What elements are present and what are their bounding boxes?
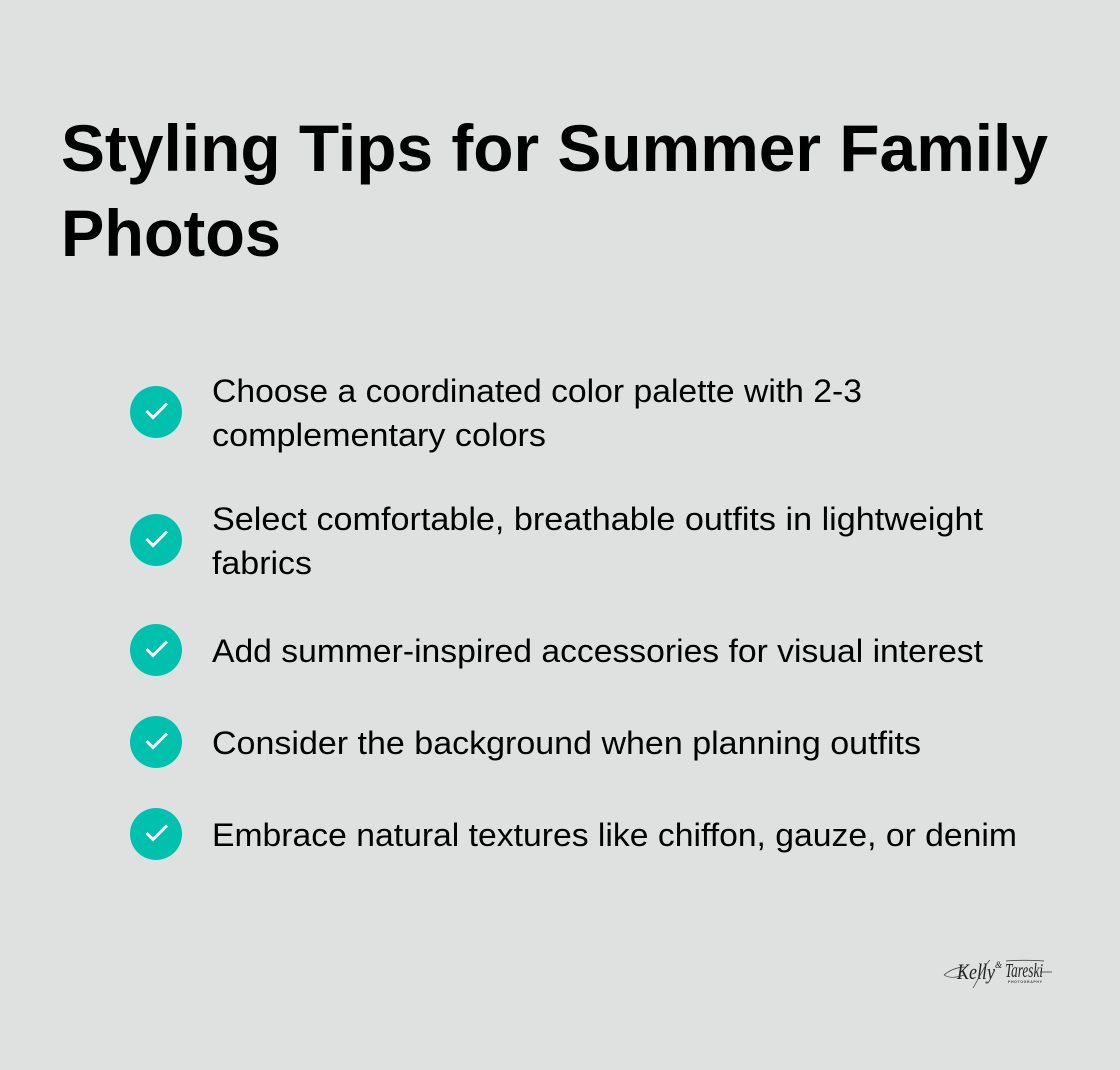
text: color palette: Choose a coordinated color palette with 2-3 bbox=[212, 373, 862, 409]
logo: signature: PHOTOGRAPHY bbox=[1008, 980, 1043, 984]
logo: signature: Kelly bbox=[956, 959, 995, 984]
text: color palette: complementary colors bbox=[212, 417, 546, 453]
title: Photos bbox=[61, 196, 281, 270]
text: outfits bbox=[212, 501, 983, 581]
icon: check circle bbox=[130, 808, 182, 860]
text: accessories: Add summer-inspired accessories for visual interest bbox=[212, 633, 983, 669]
logo: signature: Tareski bbox=[1005, 960, 1043, 982]
icon: check circle bbox=[130, 514, 182, 566]
title: Styling Tips for Summer Family bbox=[61, 111, 1048, 185]
item 1 bbox=[130, 373, 862, 453]
text: textures: Embrace natural textures like chiffon, gauze, or denim bbox=[212, 817, 1017, 853]
text: outfits: Select comfortable, breathable outfits in lightweight bbox=[212, 501, 983, 537]
logo: signature bbox=[944, 959, 1052, 988]
icon: check circle bbox=[130, 386, 182, 438]
icon: check circle bbox=[130, 624, 182, 676]
text: outfits: fabrics bbox=[212, 545, 312, 581]
title bbox=[61, 111, 1048, 270]
item 4 bbox=[130, 716, 921, 768]
item 5 bbox=[130, 808, 1017, 860]
icon: check circle bbox=[130, 716, 182, 768]
text: background: Consider the background when planning outfits bbox=[212, 725, 921, 761]
item 3 bbox=[130, 624, 983, 676]
text: color palette bbox=[212, 373, 862, 453]
checklist bbox=[130, 373, 1017, 860]
item 2 bbox=[130, 501, 983, 581]
logo: signature: & bbox=[995, 960, 1002, 970]
